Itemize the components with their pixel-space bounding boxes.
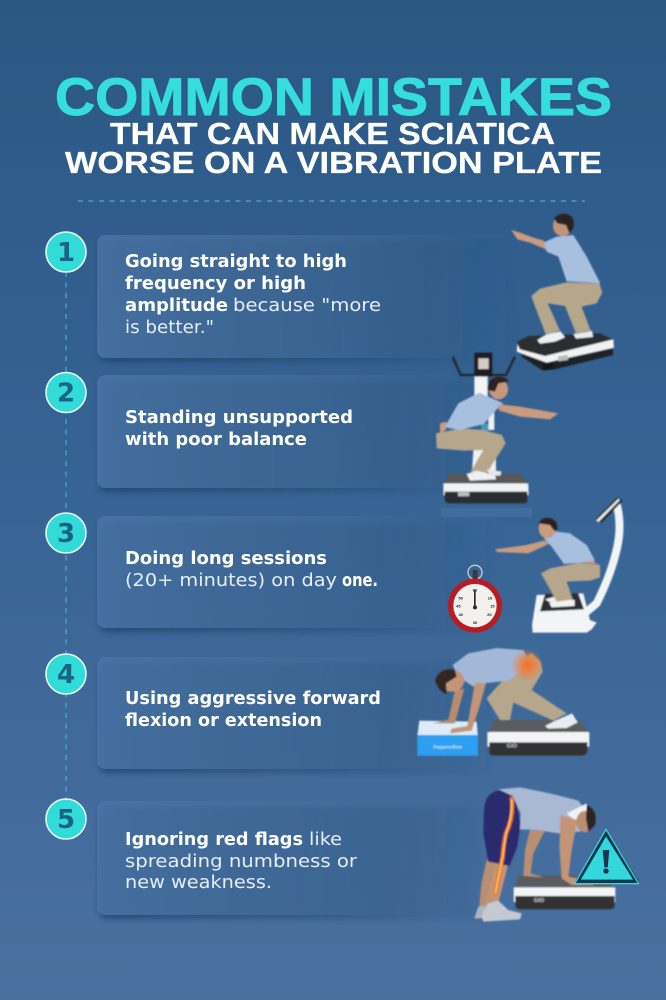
illustration: stopwatch: 20 (487, 612, 492, 617)
illustration: stopwatch: 15 (490, 603, 495, 608)
title: THAT CAN MAKE SCIATICA (110, 116, 555, 151)
panel: mistake 2 (97, 375, 499, 492)
mistake 1 text: is better." (125, 318, 214, 338)
illustration: man bending over plate with glowing sciatic nerve: GIO (534, 898, 545, 904)
mistake 1 text: frequency or high (125, 274, 306, 294)
mistake 5 text (125, 830, 358, 893)
panel: mistake 1 (97, 235, 519, 362)
number badge 5: 5 (57, 805, 75, 835)
illustration: man bending over plate with glowing sciatic nerve (474, 787, 615, 922)
illustration: man bending forward onto foam block and plate (417, 648, 589, 756)
icon: warning triangle (575, 829, 639, 884)
title (55, 68, 612, 180)
plate reflection under plate 2 (441, 508, 532, 517)
number badge 3 (46, 513, 86, 553)
illustration: stopwatch: 50 (458, 595, 464, 600)
title: WORSE ON A VIBRATION PLATE (65, 145, 602, 180)
mistake 4 text (125, 689, 381, 731)
illustration: man bending forward onto foam block and plate: Peppermillow (434, 744, 462, 749)
mistake 5 text: like (309, 830, 342, 850)
panel: mistake 4 (97, 657, 499, 773)
illustration: stopwatch: 45 (456, 603, 461, 608)
number badge 1: 1 (57, 238, 75, 268)
mistake 3 text: Doing long sessions (125, 549, 327, 569)
illustration: man squatting on plate, pointing forward (511, 214, 614, 371)
mistake 1 text: Going straight to high (125, 252, 347, 272)
number badge 5 (46, 799, 86, 839)
illustration: man squatting with rear support handle (495, 497, 623, 633)
mistake 1 text: amplitude (125, 296, 228, 316)
mistake 5 text: Ignoring red flags (125, 830, 303, 850)
illustration: man bending forward onto foam block and plate: GIO (507, 744, 518, 750)
panel: mistake 3 (97, 516, 499, 632)
mistake 5 text: new weakness. (125, 873, 272, 893)
number badge 4 (46, 654, 86, 694)
illustration: stopwatch (448, 565, 502, 633)
panel: mistake 5 (97, 801, 499, 919)
number badge 2 (46, 372, 86, 412)
number badge 4: 4 (57, 660, 75, 690)
illustration: stopwatch: 40 (458, 612, 464, 617)
mistake 1 text: because "more (233, 296, 381, 316)
number badge 2: 2 (57, 378, 75, 408)
title: COMMON MISTAKES (55, 68, 612, 127)
mistake 3 text: one. (342, 571, 378, 591)
number badge 1 (46, 232, 86, 272)
illustration: stopwatch: 10 (488, 595, 493, 600)
number badge 3: 3 (57, 519, 75, 549)
mistake 5 text: spreading numbness or (125, 852, 358, 872)
illustration: stopwatch: 30 (473, 620, 478, 625)
mistake 2 text: Standing unsupported (125, 408, 353, 428)
mistake 2 text: with poor balance (125, 430, 307, 450)
mistake 1 text (125, 252, 381, 338)
mistake 2 text (125, 408, 353, 450)
illustration: man squatting unsupported on console plate (436, 353, 558, 503)
mistake 3 text (125, 549, 378, 591)
mistake 4 text: Using aggressive forward (125, 689, 381, 709)
illustration: stopwatch: 60 (473, 587, 478, 592)
mistake 3 text: (20+ minutes) on day (125, 571, 337, 591)
mistake 4 text: flexion or extension (125, 711, 322, 731)
